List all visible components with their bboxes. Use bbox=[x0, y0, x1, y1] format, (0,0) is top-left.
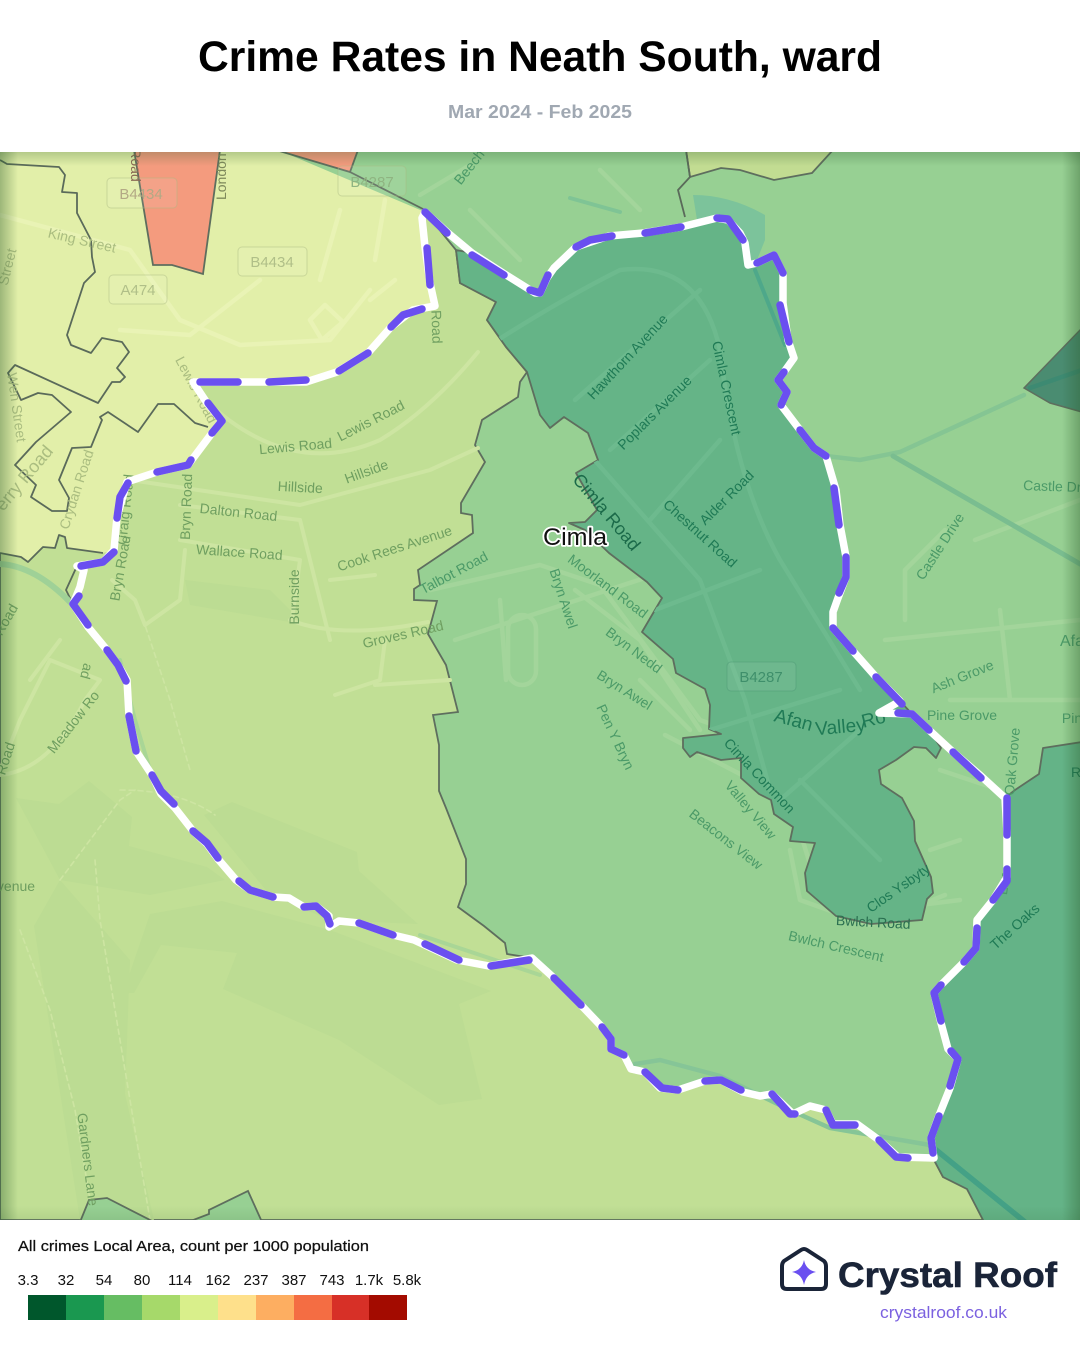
region: darkest green corner bbox=[1024, 328, 1080, 412]
roads in the yellow area bbox=[0, 200, 395, 345]
street labels: Hillside bbox=[342, 456, 390, 487]
street labels: Wen Street bbox=[4, 372, 30, 443]
legend tick values bbox=[18, 1272, 422, 1289]
road shield labels: B4287 bbox=[350, 174, 394, 191]
street labels: Clos Ysbyty bbox=[863, 860, 933, 916]
region: top yellow-green patch bbox=[686, 150, 833, 180]
street labels: Cimla Crescent bbox=[709, 339, 745, 437]
street labels: Lewis Road bbox=[258, 435, 333, 457]
boundary north of the town centre bbox=[350, 172, 425, 210]
place label: Cimla: Cimla bbox=[543, 524, 608, 551]
street labels: Dalton Road bbox=[199, 500, 278, 524]
street labels: Lewis Road bbox=[172, 354, 221, 426]
legend tick values: 5.8k bbox=[393, 1272, 422, 1289]
street labels: Poplars Avenue bbox=[614, 372, 695, 453]
road shield labels: A474 bbox=[120, 282, 156, 299]
roads in the Cimla core bbox=[498, 336, 716, 731]
region: light green south-west neighbourhoods bbox=[0, 212, 984, 1220]
street labels: Ro bbox=[859, 707, 888, 733]
website url: crystalroof.co.uk bbox=[880, 1304, 1008, 1322]
street labels: Crydan Road bbox=[56, 448, 97, 531]
region: salmon high-crime area 2 bbox=[276, 150, 358, 172]
roads in the light green area bbox=[0, 352, 478, 1220]
street labels: Bryn Road bbox=[177, 473, 195, 540]
street labels: Lane bbox=[994, 863, 1014, 896]
street labels: Moorland Road bbox=[565, 551, 651, 621]
street labels: Craig Road bbox=[113, 473, 137, 546]
street labels: Bryn Awel bbox=[594, 667, 655, 713]
street labels: Beech bbox=[451, 146, 488, 187]
street labels: Valley View bbox=[722, 777, 780, 843]
street labels: Talbot Road bbox=[417, 548, 490, 597]
road shield labels: B4287 bbox=[739, 669, 783, 686]
street labels: Afan bbox=[772, 705, 815, 736]
street labels: Bryn Nedd bbox=[603, 624, 665, 676]
street labels: ad bbox=[77, 662, 97, 681]
street labels: Bwlch Crescent bbox=[787, 927, 885, 965]
street labels: Chestnut Road bbox=[660, 496, 740, 570]
street labels: Cimla Road bbox=[569, 470, 644, 555]
region: dark green south-east bbox=[931, 742, 1080, 1222]
street labels: King Street bbox=[47, 225, 118, 256]
region: salmon high-crime area 1 bbox=[134, 150, 220, 274]
pond and reservoir bbox=[693, 195, 765, 265]
street labels: Oak Grove bbox=[1001, 727, 1023, 796]
street labels: Pine Grove bbox=[927, 707, 997, 723]
street labels: Wallace Road bbox=[196, 541, 283, 563]
woodland patches bbox=[16, 580, 491, 1220]
icon: house with star bbox=[782, 1249, 826, 1289]
legend tick values: 80 bbox=[134, 1272, 150, 1289]
street labels: Road bbox=[428, 310, 446, 344]
street labels: Burnside bbox=[286, 569, 302, 625]
street labels: Bryn Awel bbox=[547, 567, 581, 630]
street labels: London Road bbox=[213, 116, 229, 200]
legend tick values: 162 bbox=[205, 1272, 231, 1289]
road shield labels: B4434 bbox=[250, 254, 294, 271]
street labels: Alder Road bbox=[696, 467, 757, 528]
road shield labels bbox=[107, 166, 796, 691]
street labels: Bryn Road bbox=[106, 534, 134, 602]
street labels: Groves Road bbox=[361, 617, 445, 651]
legend colour scale bbox=[28, 1295, 407, 1320]
wordmark: Crystal Roof bbox=[838, 1256, 1057, 1295]
region: dark green Cimla core bbox=[456, 218, 941, 924]
street labels: Pen Y Bryn bbox=[593, 702, 638, 772]
road shield labels: B4434 bbox=[119, 186, 163, 203]
street labels: Beacons View bbox=[686, 806, 767, 873]
street labels: Road bbox=[128, 148, 144, 182]
title: Crime Rates in Neath South, ward bbox=[198, 34, 882, 81]
boundary dashes in purple bbox=[73, 212, 1007, 1158]
legend tick values: 3.3 bbox=[18, 1272, 38, 1289]
boundary casing in white bbox=[73, 212, 1007, 1158]
ward boundary dashed outline bbox=[73, 212, 1007, 1158]
street labels: Cimla Common bbox=[721, 735, 798, 816]
logo: Crystal Roof bbox=[782, 1249, 1057, 1322]
legend bbox=[18, 1238, 422, 1320]
street labels: Meadow Ro bbox=[44, 687, 102, 756]
street labels: Cook Rees Avenue bbox=[335, 522, 454, 574]
legend tick values: 114 bbox=[168, 1272, 192, 1289]
legend tick values: 1.7k bbox=[355, 1272, 384, 1289]
region: yellow town centre bbox=[0, 152, 435, 562]
street labels: Castle Drive bbox=[912, 510, 967, 583]
legend tick values: 237 bbox=[243, 1272, 269, 1289]
legend tick values: 743 bbox=[319, 1272, 345, 1289]
street labels: Lewis Road bbox=[335, 397, 407, 444]
subtitle: date range: Mar 2024 - Feb 2025 bbox=[448, 101, 632, 122]
legend title: All crimes Local Area, count per 1000 population bbox=[18, 1238, 369, 1255]
street labels: Valley bbox=[815, 715, 867, 740]
legend tick values: 387 bbox=[281, 1272, 307, 1289]
street labels: Ash Grove bbox=[928, 656, 996, 696]
legend tick values: 54 bbox=[96, 1272, 112, 1289]
region: small green areas at bottom bbox=[80, 1191, 262, 1222]
street labels: The Oaks bbox=[987, 900, 1043, 953]
street labels: Gardners Lane bbox=[74, 1112, 102, 1207]
small area boundaries in the town centre bbox=[0, 150, 690, 604]
legend tick values: 32 bbox=[58, 1272, 74, 1289]
roads in the green areas bbox=[420, 165, 1080, 925]
rivers bbox=[0, 198, 1080, 1222]
street labels: Hillside bbox=[277, 478, 323, 496]
street labels: Bwlch Road bbox=[836, 912, 911, 932]
street labels: Hawthorn Avenue bbox=[584, 311, 671, 402]
